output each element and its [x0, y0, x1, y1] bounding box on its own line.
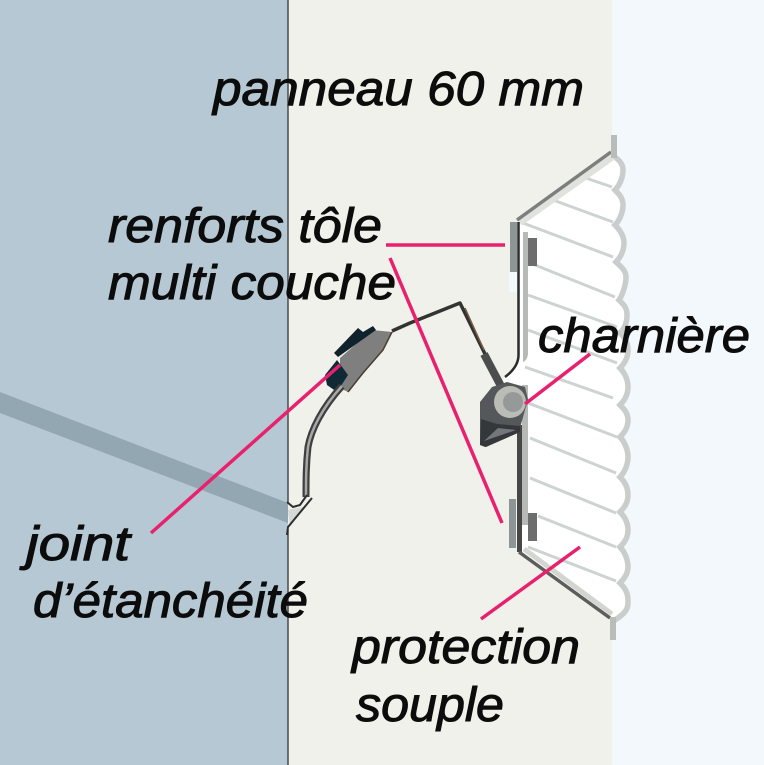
lower metal edge and reinforcement: [509, 385, 616, 640]
seal arm: wire linkage: [392, 303, 502, 388]
label: multi couche: multi couche: [108, 257, 396, 310]
upper metal edge and reinforcement: [505, 135, 617, 377]
label: charnière: charnière: [538, 310, 750, 363]
panel: neighbouring blue door face: [0, 0, 303, 765]
icon: sealing gasket: [287, 326, 392, 535]
label: d'étanchéité: d’étanchéité: [33, 575, 308, 628]
flexible protection: white scalloped cavity: [500, 155, 628, 622]
label: renforts tôle: renforts tôle: [108, 200, 382, 253]
label: joint: joint: [19, 518, 132, 571]
label: protection: protection: [350, 621, 580, 674]
callout lines: [151, 245, 590, 619]
title: panneau 60 mm: panneau 60 mm: [211, 63, 584, 116]
panel: door section: [288, 0, 612, 765]
label: souple: souple: [356, 679, 504, 732]
icon: hinge: [480, 382, 528, 447]
